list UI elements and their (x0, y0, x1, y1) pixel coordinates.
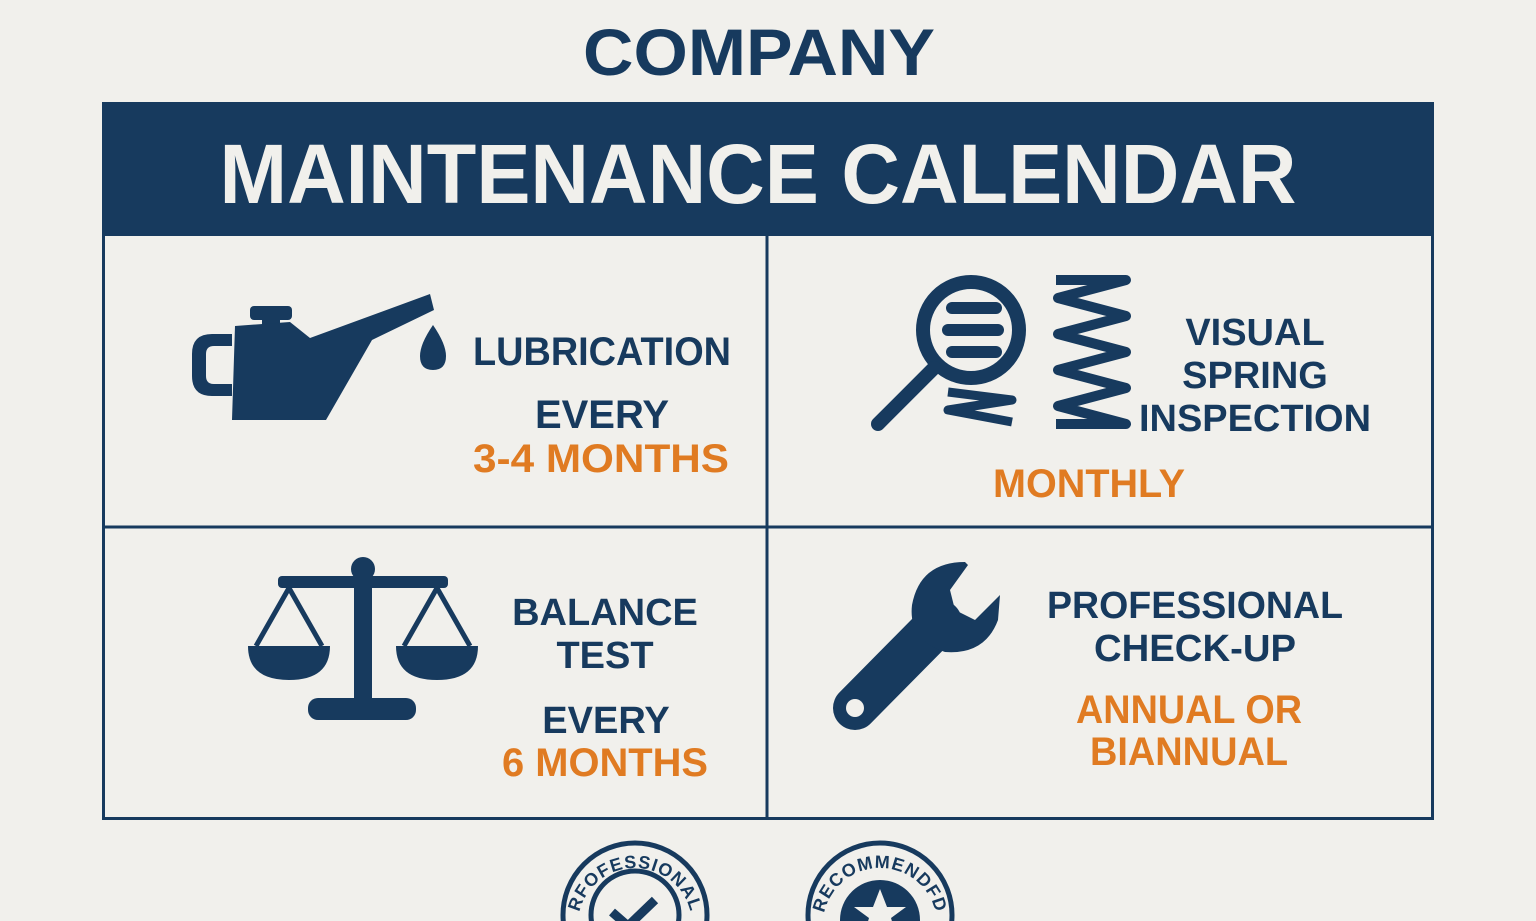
panel: calendar frame (102, 102, 1434, 820)
panel: balance test: EVERY (542, 700, 670, 742)
icon: spring (1056, 280, 1126, 424)
panel: visual spring inspection: INSPECTION (1139, 398, 1371, 440)
text: lubrication: LUBRICATION (473, 330, 731, 374)
badge: professional: RFOFESSIONAL (568, 856, 700, 911)
heading: MAINTENANCE CALENDAR (220, 127, 1296, 221)
panel: lubrication: EVERY (535, 393, 669, 437)
panel: professional check-up (846, 562, 1343, 774)
title: COMPANY (583, 15, 935, 89)
text: balance test: BALANCE (512, 592, 698, 634)
panel: lubrication: 3-4 MONTHS (473, 437, 729, 481)
icon: wrench (846, 562, 1000, 717)
panel: balance test (248, 557, 708, 785)
badge: recommended: RECOMMENDFD (812, 856, 946, 912)
panel: professional check-up: ANNUAL OR (1076, 688, 1302, 732)
icon: oil can (192, 294, 446, 420)
icon: scale (248, 557, 478, 720)
panel: professional check-up: BIANNUAL (1090, 730, 1288, 774)
text: professional check-up: PROFESSIONAL (1047, 585, 1343, 627)
panel: lubrication (192, 294, 731, 481)
panel: visual spring inspection: SPRING (1182, 355, 1328, 397)
text: visual spring inspection: VISUAL (1185, 312, 1325, 354)
panel: balance test: 6 MONTHS (502, 741, 708, 785)
panel: visual spring inspection: MONTHLY (993, 462, 1185, 506)
panel: visual spring inspection (878, 280, 1371, 506)
panel: professional check-up: CHECK-UP (1094, 628, 1296, 670)
icon: magnifier (878, 282, 1019, 424)
panel: balance test: TEST (556, 635, 654, 677)
